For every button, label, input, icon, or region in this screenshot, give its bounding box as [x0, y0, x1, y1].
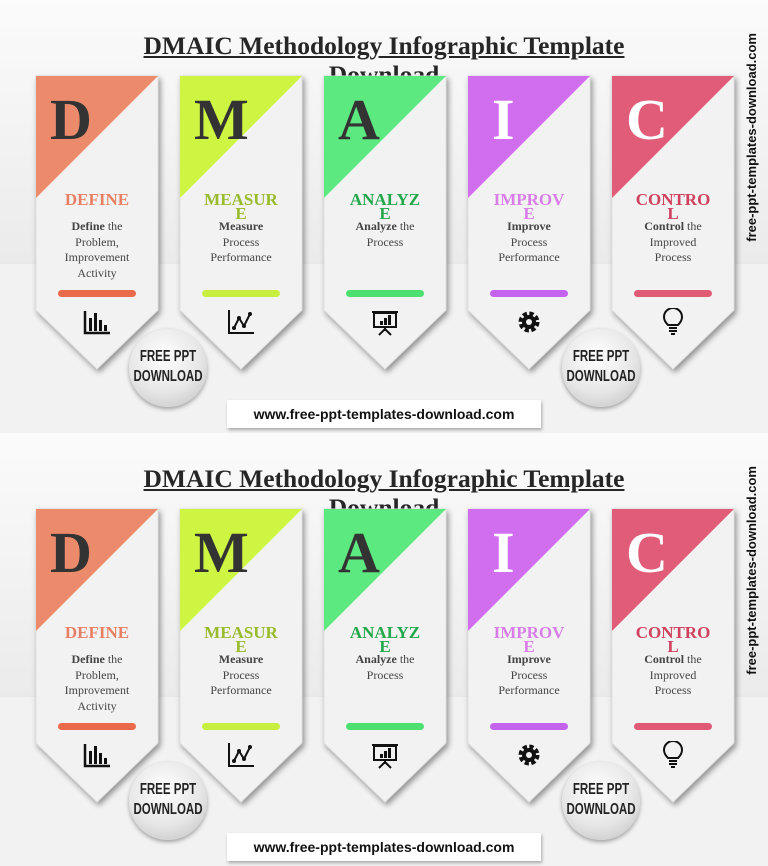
- card: Control: Improved: [650, 668, 696, 682]
- card: Define: Activity: [77, 266, 117, 280]
- icon: line chart: [228, 743, 254, 767]
- badge right: DOWNLOAD: [566, 368, 636, 385]
- card: Control: L: [667, 204, 679, 223]
- card: Improve: Improve: [507, 219, 551, 233]
- title: DMAIC Methodology Infographic Template: [144, 464, 624, 493]
- icon: gear: [518, 312, 540, 332]
- card: Measure: Process: [223, 668, 259, 682]
- badge left: FREE PPT: [140, 348, 196, 365]
- card: Control: [610, 508, 740, 808]
- card: Control: Process: [655, 250, 691, 264]
- card: Improve: E: [523, 204, 535, 223]
- card: Measure: E: [235, 637, 247, 656]
- card: Improve: Improve: [507, 652, 551, 666]
- card: Control: [610, 74, 740, 375]
- card: Improve: IMPROV: [494, 190, 564, 209]
- card: Improve: [466, 74, 596, 375]
- card: Define: D: [50, 87, 92, 152]
- badge right: FREE PPT: [573, 781, 629, 798]
- icon: presentation board: [372, 744, 398, 769]
- badge right: DOWNLOAD: [566, 801, 636, 818]
- card: Define: D: [50, 520, 92, 585]
- card: Improve: [466, 508, 596, 808]
- url box: www.free-ppt-templates-download.com: [254, 839, 514, 855]
- card: Improve: IMPROV: [494, 623, 564, 642]
- card: Control: Process: [655, 683, 691, 697]
- card: Control: Control the: [644, 219, 702, 233]
- badge left: [129, 329, 207, 407]
- slide 1: [0, 0, 768, 433]
- card: Analyze: [322, 508, 452, 808]
- card: Measure: [178, 508, 308, 808]
- card: Measure: Measure: [219, 652, 263, 666]
- card: Measure: E: [235, 204, 247, 223]
- icon: gear: [518, 744, 540, 766]
- url box: [227, 400, 541, 428]
- card: Measure: Performance: [210, 683, 272, 697]
- card: Improve: I: [492, 520, 515, 585]
- card: Improve: Performance: [498, 250, 560, 264]
- card: Improve: Process: [511, 668, 547, 682]
- title: Download: [329, 493, 439, 522]
- icon: line chart: [228, 310, 254, 334]
- title: DMAIC Methodology Infographic Template: [144, 31, 624, 60]
- card: Control: C: [626, 87, 668, 152]
- badge right: FREE PPT: [573, 348, 629, 365]
- card: Improve: E: [523, 637, 535, 656]
- card: Control: CONTRO: [636, 623, 710, 642]
- url box: [227, 833, 541, 861]
- card: Define: Activity: [77, 698, 117, 712]
- card: Control: Improved: [650, 234, 696, 248]
- icon: bar chart: [84, 744, 110, 768]
- card: Control: Control the: [644, 652, 702, 666]
- vertical watermark: free-ppt-templates-download.com: [744, 466, 759, 675]
- card: Define: Problem,: [75, 234, 119, 248]
- card: Improve: I: [492, 87, 515, 152]
- card: Analyze: Analyze the: [356, 652, 414, 666]
- badge right: [562, 329, 640, 407]
- vertical watermark: free-ppt-templates-download.com: [744, 33, 759, 242]
- icon: presentation board: [372, 311, 398, 336]
- card: Analyze: ANALYZ: [350, 190, 420, 209]
- card: Measure: MEASUR: [204, 190, 278, 209]
- title: [144, 31, 624, 89]
- card: Analyze: Analyze the: [356, 219, 414, 233]
- title: Download: [329, 60, 439, 89]
- card: Analyze: E: [379, 637, 391, 656]
- card: Improve: Process: [511, 234, 547, 248]
- card: Define: Define the: [72, 219, 122, 233]
- card: Define: Problem,: [75, 668, 119, 682]
- card: Measure: Process: [223, 234, 259, 248]
- url box: www.free-ppt-templates-download.com: [254, 406, 514, 422]
- card: Analyze: Process: [367, 234, 403, 248]
- card: Define: Improvement: [65, 683, 129, 697]
- badge left: FREE PPT: [140, 781, 196, 798]
- badge left: DOWNLOAD: [133, 368, 203, 385]
- card: Analyze: Process: [367, 668, 403, 682]
- card: Define: [34, 508, 164, 808]
- card: Analyze: A: [338, 520, 380, 585]
- card: Define: DEFINE: [65, 190, 129, 209]
- icon: bar chart: [84, 311, 110, 334]
- card: Control: C: [626, 520, 668, 585]
- card: Define: DEFINE: [65, 623, 129, 642]
- badge right: [562, 762, 640, 840]
- card: Control: CONTRO: [636, 190, 710, 209]
- badge left: DOWNLOAD: [133, 801, 203, 818]
- card: Analyze: [322, 74, 452, 375]
- card: Analyze: E: [379, 204, 391, 223]
- icon: light bulb: [663, 741, 683, 768]
- card: Define: Improvement: [65, 250, 129, 264]
- card: Measure: M: [194, 87, 249, 152]
- icon: light bulb: [663, 308, 683, 335]
- slide 2: [0, 433, 768, 866]
- card: Control: L: [667, 637, 679, 656]
- card: Measure: Performance: [210, 250, 272, 264]
- card: Measure: [178, 74, 308, 375]
- card: Measure: MEASUR: [204, 623, 278, 642]
- card: Analyze: A: [338, 87, 380, 152]
- card: Measure: M: [194, 520, 249, 585]
- card: Measure: Measure: [219, 219, 263, 233]
- card: Define: [34, 74, 164, 375]
- card: Define: Define the: [72, 652, 122, 666]
- badge left: [129, 762, 207, 840]
- card: Analyze: ANALYZ: [350, 623, 420, 642]
- title: [144, 464, 624, 522]
- card: Improve: Performance: [498, 683, 560, 697]
